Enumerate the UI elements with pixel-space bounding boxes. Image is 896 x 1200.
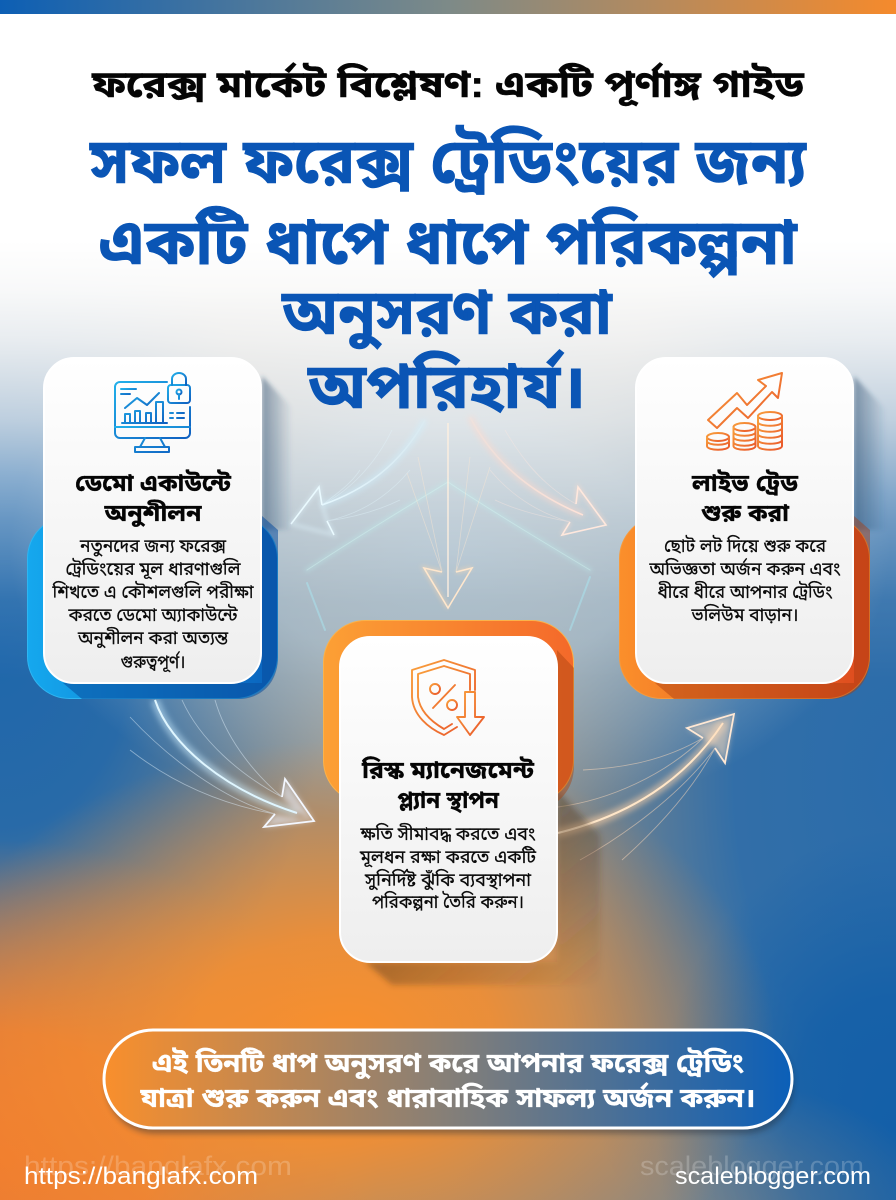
card heading: রিস্ক ম্যানেজমেন্ট (361, 756, 534, 784)
card heading: প্ল্যান স্থাপন (397, 787, 500, 814)
card heading: লাইভ ট্রেড (691, 469, 799, 497)
arrow: to demo card (291, 420, 425, 535)
card text (52, 535, 255, 673)
arrow: demo card to risk card (130, 700, 314, 827)
white card (340, 637, 557, 962)
arrow: downward centre (407, 423, 490, 608)
main heading: অনুসরণ করা (281, 278, 613, 350)
footer link: banglafx: https://banglafx.com (24, 1151, 292, 1181)
panel backing: blue (28, 516, 278, 698)
top gradient bar (0, 0, 896, 14)
card text: নতুনদের জন্য ফরেক্স (79, 535, 226, 557)
card text: ক্ষতি সীমাবদ্ধ করতে এবং (360, 822, 536, 844)
panel backing: orange (324, 620, 574, 802)
panel backing: orange (620, 516, 870, 698)
card text: পরিকল্পনা তৈরি করুন। (372, 890, 524, 912)
card text: শিখতে এ কৌশলগুলি পরীক্ষা (52, 580, 255, 602)
footer link: scaleblogger: scaleblogger.com (675, 1163, 871, 1190)
icon: monitor chart with lock (115, 373, 190, 452)
card text: মূলধন রক্ষা করতে একটি (359, 845, 537, 868)
card text (359, 822, 537, 912)
icon: shield with percent and down arrow (412, 660, 484, 735)
card text: ট্রেডিংয়ের মূল ধারণাগুলি (66, 557, 241, 580)
icon: rising arrow and coins (707, 373, 782, 450)
card text (649, 534, 840, 625)
panel: risk management (324, 620, 600, 985)
card heading (75, 469, 231, 527)
arrow: risk card to live trade card (558, 714, 734, 860)
call to action banner: এই তিনটি ধাপ অনুসরণ করে আপনার ফরেক্স ট্রেডিং (152, 1047, 744, 1080)
card heading: অনুশীলন (103, 499, 203, 527)
card text: গুরুত্বপূর্ণ। (120, 650, 186, 673)
call to action banner: যাত্রা শুরু করুন এবং ধারাবাহিক সাফল্য অর্জন করুন। (139, 1082, 755, 1113)
panel: live trade (620, 358, 886, 699)
card text: ছোট লট দিয়ে শুরু করে (664, 534, 827, 556)
card heading: শুরু করা (701, 500, 790, 527)
white card (636, 358, 853, 683)
footer link: scaleblogger (640, 1151, 871, 1190)
card heading (691, 469, 799, 527)
card text: করতে ডেমো অ্যাকাউন্টে (68, 603, 238, 625)
card text: ধীরে ধীরে আপনার ট্রেডিং (658, 580, 832, 602)
card heading (361, 756, 534, 814)
call to action banner (104, 1030, 794, 1134)
card text: ভলিউম বাড়ান। (691, 603, 798, 625)
title: ফরেক্স মার্কেট বিশ্লেষণ: একটি পূর্ণাঙ্গ গাইড (91, 63, 805, 107)
light beams (307, 482, 590, 630)
footer link: scaleblogger: scaleblogger.com (640, 1151, 864, 1181)
main heading: একটি ধাপে ধাপে পরিকল্পনা (99, 206, 798, 279)
panel: demo account (28, 358, 292, 699)
main heading (89, 125, 807, 422)
card text: অভিজ্ঞতা অর্জন করুন এবং (649, 557, 840, 579)
main heading: সফল ফরেক্স ট্রেডিংয়ের জন্য (89, 125, 807, 197)
white card (44, 358, 261, 683)
card text: সুনির্দিষ্ট ঝুঁকি ব্যবস্থাপনা (364, 868, 532, 891)
footer link: banglafx: https://banglafx.com (24, 1163, 258, 1190)
arrow: to live trade card (470, 417, 606, 535)
footer link: banglafx (24, 1151, 292, 1190)
card text: অনুশীলন করা অত্যন্ত (77, 626, 229, 649)
card heading: ডেমো একাউন্টে (75, 469, 231, 497)
main heading: অপরিহার্য। (307, 348, 586, 422)
